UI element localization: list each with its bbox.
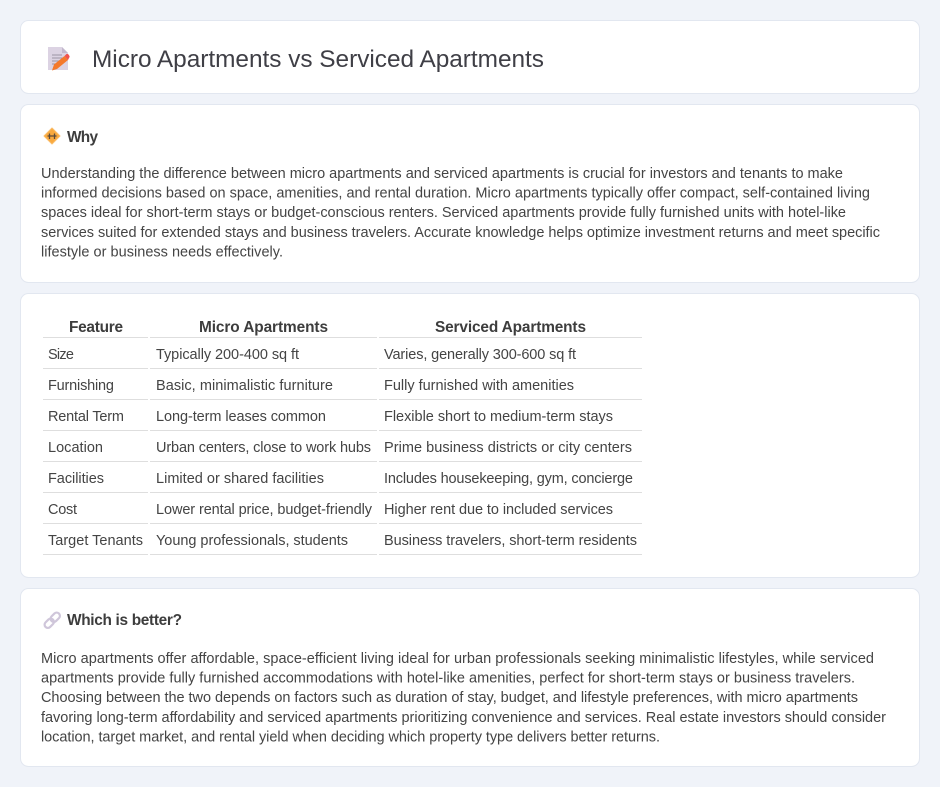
- table row: size: Typically 200-400 sq ft: [156, 347, 299, 363]
- text block: why paragraph: services suited for extended stays and business travelers. Accurate knowledge helps optimize investment returns and meet specific: [41, 225, 880, 241]
- table row: facilities: Includes housekeeping, gym, concierge: [384, 471, 633, 487]
- table row: rental term: Long-term leases common: [156, 409, 326, 425]
- table row: location: [48, 440, 632, 456]
- table row: size: Varies, generally 300-600 sq ft: [384, 347, 576, 363]
- table row: location: Urban centers, close to work hubs: [156, 440, 371, 456]
- table row: cost: [48, 502, 613, 518]
- table row: facilities: Limited or shared facilities: [156, 471, 324, 487]
- heading: which is better: Which is better?: [67, 612, 182, 629]
- table row: target tenants: Young professionals, students: [156, 533, 348, 549]
- table row: facilities: Facilities: [48, 471, 104, 487]
- table row: furnishing: Furnishing: [48, 378, 114, 394]
- table row: furnishing: Basic, minimalistic furniture: [156, 378, 333, 394]
- table row: cost: Cost: [48, 502, 77, 518]
- table row: location: Prime business districts or city centers: [384, 440, 632, 456]
- text block: which is better paragraph: [41, 651, 886, 745]
- text block: why paragraph: Understanding the difference between micro apartments and serviced apartments is crucial for investors and tenants to make: [41, 166, 843, 182]
- panel: why: [20, 104, 920, 282]
- text block: why paragraph: spaces ideal for short-term stays or budget-conscious renters. Serviced apartments provide fully furnished units with hotel-like: [41, 205, 846, 221]
- text block: which is better paragraph: Choosing between the two depends on factors such as duration of stay, budget, and lifestyle preferences, with micro apartments: [41, 690, 858, 706]
- table row: rental term: Flexible short to medium-term stays: [384, 409, 613, 425]
- table row: size: Size: [48, 347, 74, 363]
- text block: which is better paragraph: apartments provide fully furnished accommodations with hotel-like amenities, perfect for short-term stays or business travelers.: [41, 671, 855, 687]
- heading: why: Why: [67, 129, 98, 146]
- panel: which is better: [20, 588, 920, 766]
- table row: cost: Higher rent due to included services: [384, 502, 613, 518]
- table row: rental term: [48, 409, 613, 425]
- text block: why paragraph: lifestyle or business needs effectively.: [41, 244, 283, 260]
- icon: memo with pencil: [48, 47, 70, 70]
- table row: target tenants: [48, 533, 637, 549]
- table row: size: [48, 347, 576, 363]
- icon: chain link: [43, 611, 61, 629]
- table header row: Micro Apartments: [199, 319, 328, 336]
- text block: which is better paragraph: location, target market, and rental yield when deciding which property type delivers better returns.: [41, 729, 660, 745]
- table row: target tenants: Target Tenants: [48, 533, 143, 549]
- panel: comparison table: [20, 294, 920, 578]
- table header row: Serviced Apartments: [435, 319, 586, 336]
- table row: furnishing: [48, 378, 574, 394]
- table header row: [69, 319, 586, 336]
- text block: why paragraph: informed decisions based on space, amenities, and rental duration. Micro apartments typically offer compact, self-contained living: [41, 186, 870, 202]
- text block: which is better paragraph: favoring long-term affordability and serviced apartments prioritizing convenience and services. Real estate investors should consider: [41, 710, 886, 726]
- text block: which is better paragraph: Micro apartments offer affordable, space-efficient living ideal for urban professionals seeking minimalistic lifestyles, while serviced: [41, 651, 874, 667]
- table row: rental term: Rental Term: [48, 409, 124, 425]
- text block: why paragraph: [41, 166, 880, 260]
- table header row: Feature: [69, 319, 123, 336]
- title: Micro Apartments vs Serviced Apartments: [92, 46, 544, 73]
- table row: cost: Lower rental price, budget-friendly: [156, 502, 373, 518]
- icon: orange diamond sign: [44, 128, 60, 144]
- table row: furnishing: Fully furnished with amenities: [384, 378, 574, 394]
- table row: facilities: [48, 471, 633, 487]
- panel: title header: [20, 20, 920, 94]
- table row: target tenants: Business travelers, short-term residents: [384, 533, 637, 549]
- table row: location: Location: [48, 440, 103, 456]
